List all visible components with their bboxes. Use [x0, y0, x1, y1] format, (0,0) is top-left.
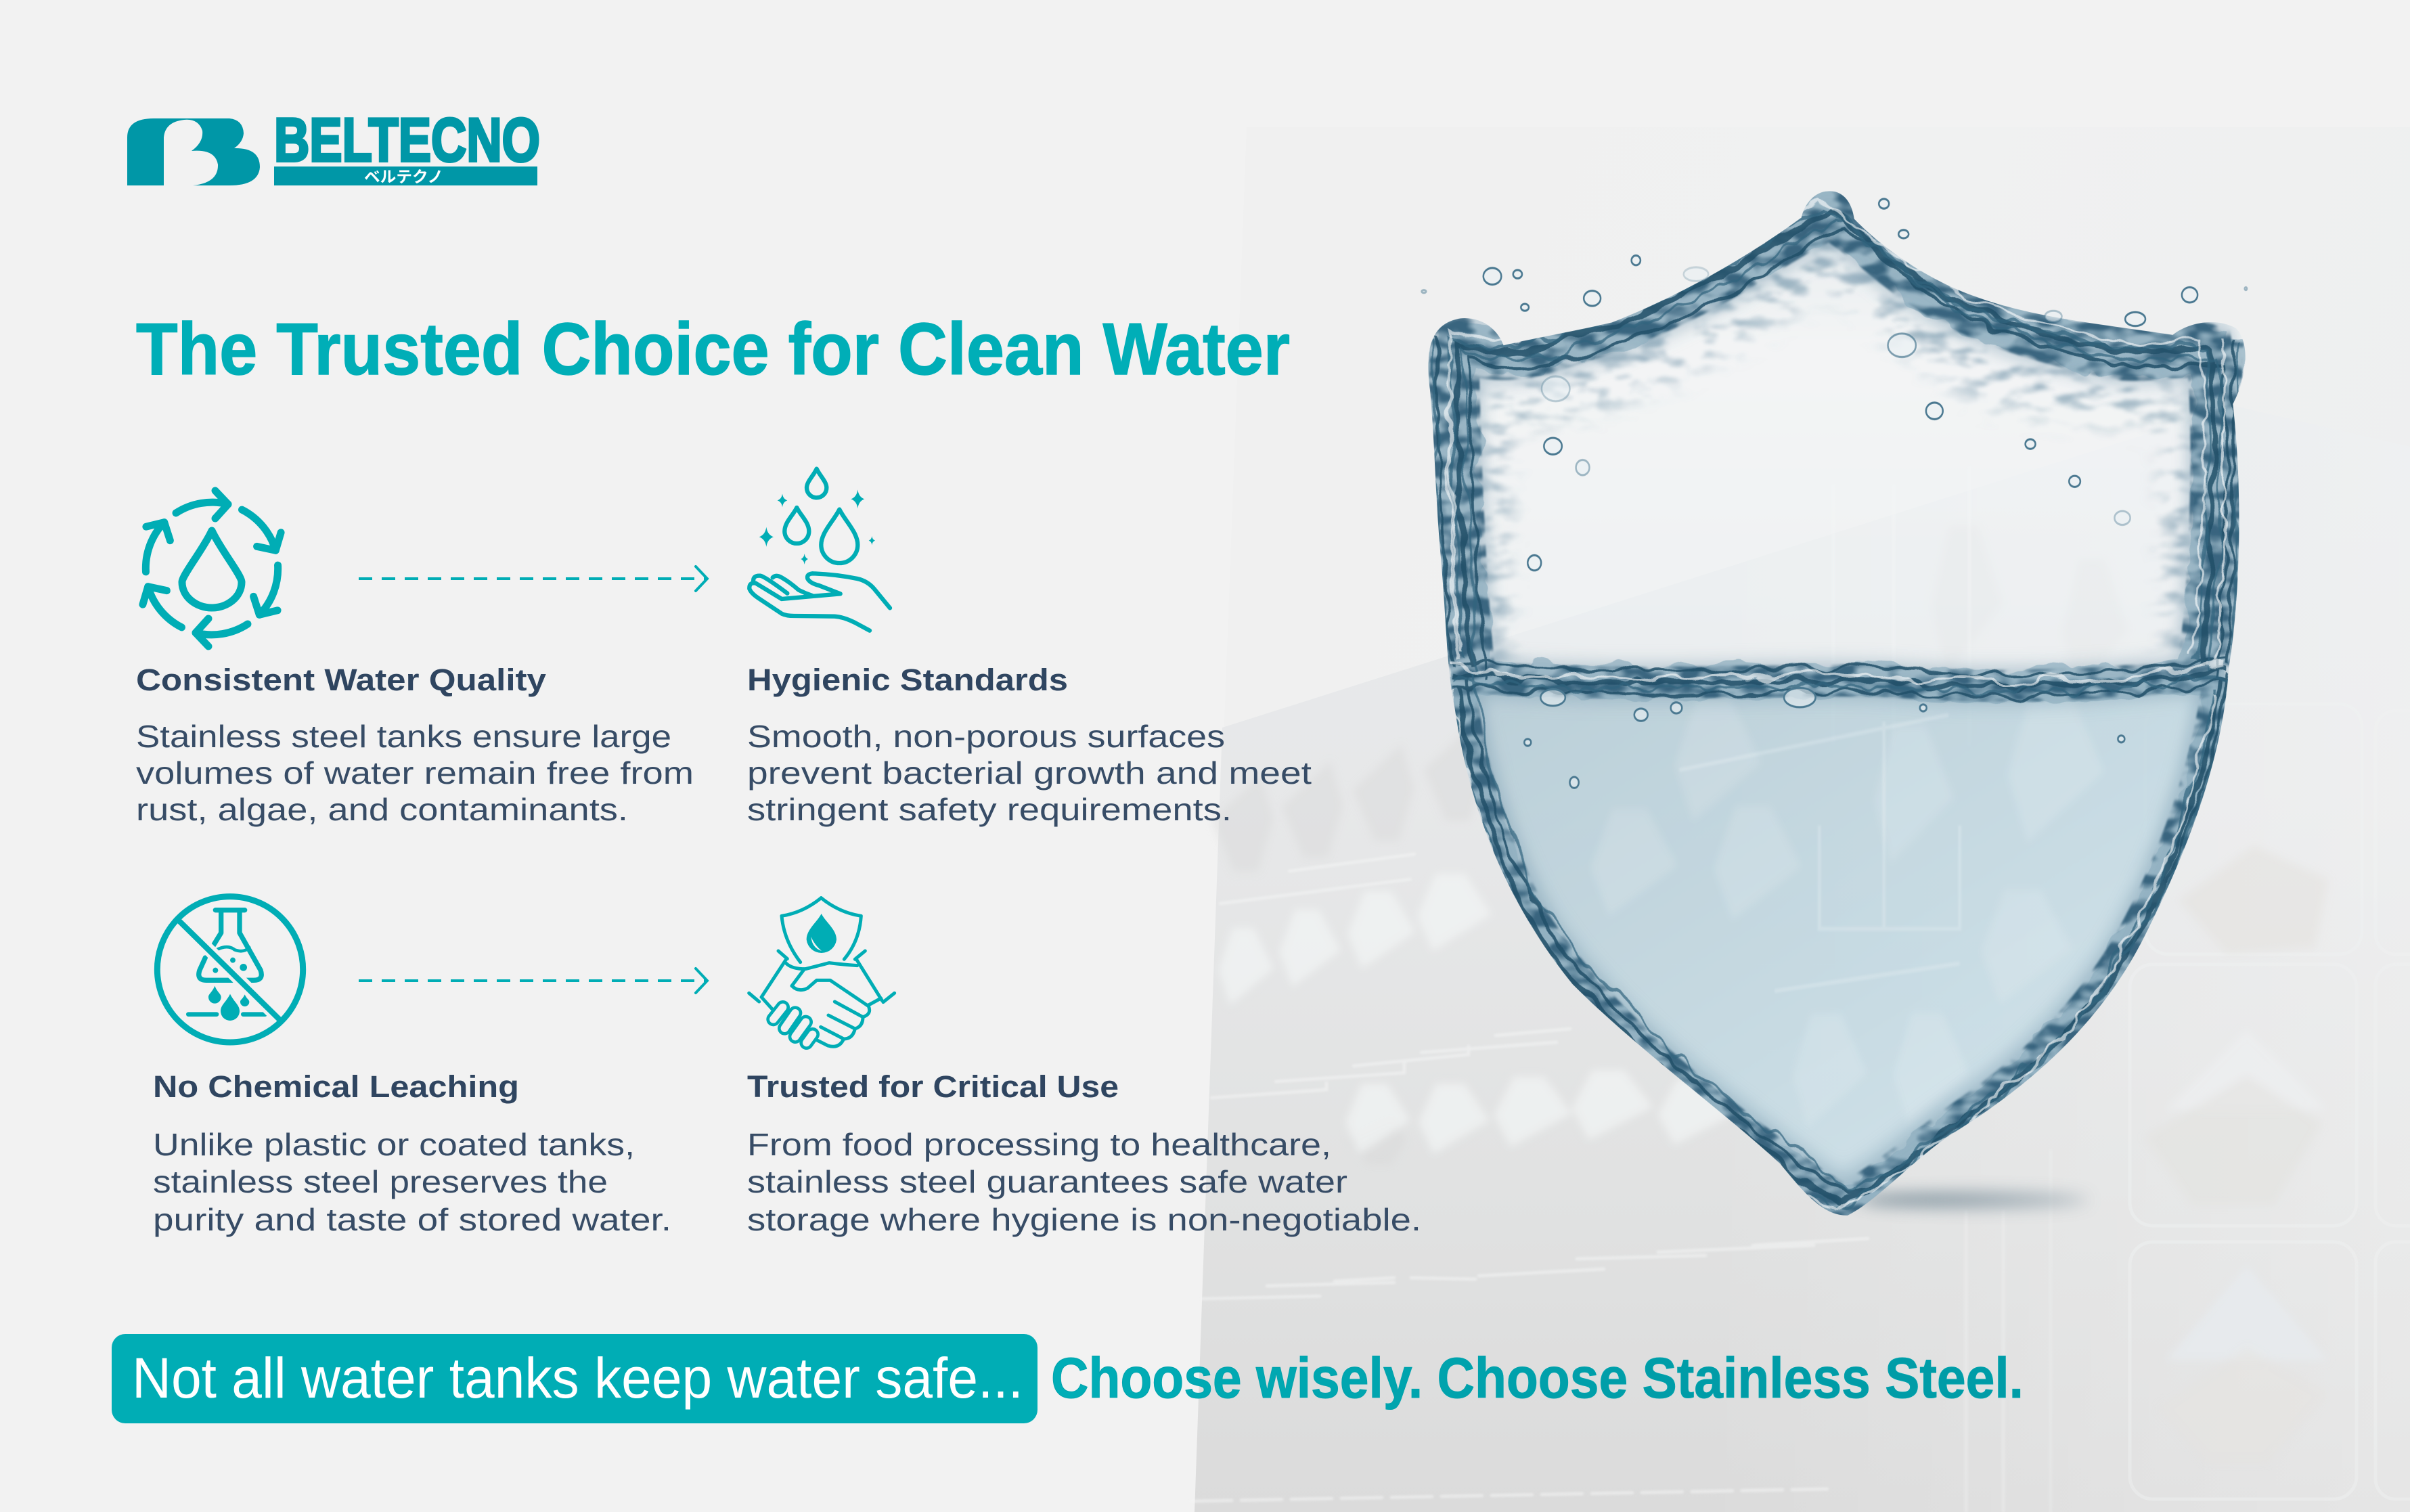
- block: trusted for critical use: storage where hygiene is non-negotiable.: [747, 1202, 1421, 1237]
- tank panels seen through water: [1599, 710, 2044, 896]
- title: The Trusted Choice for Clean Water: [136, 308, 1290, 391]
- arrow: bottom row: [359, 969, 707, 993]
- block: no chemical leaching: Unlike plastic or coated tanks,: [153, 1127, 635, 1162]
- block: hygienic standards: prevent bacterial growth and meet: [747, 755, 1312, 791]
- block: consistent water quality: Stainless steel tanks ensure large: [136, 719, 671, 754]
- block: trusted for critical use: Trusted for Critical Use: [747, 1069, 1119, 1104]
- block: no chemical leaching: [153, 1069, 671, 1237]
- block: consistent water quality: volumes of water remain free from: [136, 755, 694, 791]
- block: no chemical leaching: purity and taste of stored water.: [153, 1202, 671, 1237]
- callout: bottom banner: [112, 1334, 1037, 1423]
- icon: no chemical leaching: [157, 897, 303, 1042]
- block: trusted for critical use: From food processing to healthcare,: [747, 1127, 1331, 1162]
- logo: Beltecno: BELTECNO: [274, 106, 540, 175]
- block: hygienic standards: stringent safety requirements.: [747, 792, 1232, 827]
- block: hygienic standards: Smooth, non-porous surfaces: [747, 719, 1225, 754]
- block: consistent water quality: Consistent Water Quality: [136, 663, 546, 697]
- block: trusted for critical use: [747, 1069, 1421, 1237]
- shadow under shield: [1858, 1193, 2088, 1207]
- icon: recycling arrows around water drop: [127, 491, 297, 646]
- block: no chemical leaching: No Chemical Leaching: [153, 1069, 519, 1104]
- logo: Beltecno: ベルテクノ: [364, 168, 443, 185]
- illustration: water shield half full: [1421, 191, 2248, 1216]
- logo: Beltecno: [127, 106, 540, 185]
- background: faded steel tank photo: [1191, 127, 2410, 1512]
- block: trusted for critical use: stainless steel guarantees safe water: [747, 1164, 1347, 1199]
- icon: water drops above open hand: [749, 469, 890, 631]
- callout: bottom banner: Not all water tanks keep water safe...: [132, 1346, 1023, 1410]
- droplets around and inside shield: [1422, 199, 2247, 788]
- block: hygienic standards: [747, 663, 1312, 827]
- block: consistent water quality: [136, 663, 694, 827]
- arrow: top row: [359, 566, 707, 591]
- block: consistent water quality: rust, algae, and contaminants.: [136, 792, 628, 827]
- callout: bottom tagline: Choose wisely. Choose Stainless Steel.: [1051, 1346, 2024, 1410]
- icon: handshake below shield with drop: [749, 898, 895, 1046]
- block: no chemical leaching: stainless steel preserves the: [153, 1164, 608, 1199]
- block: hygienic standards: Hygienic Standards: [747, 663, 1068, 697]
